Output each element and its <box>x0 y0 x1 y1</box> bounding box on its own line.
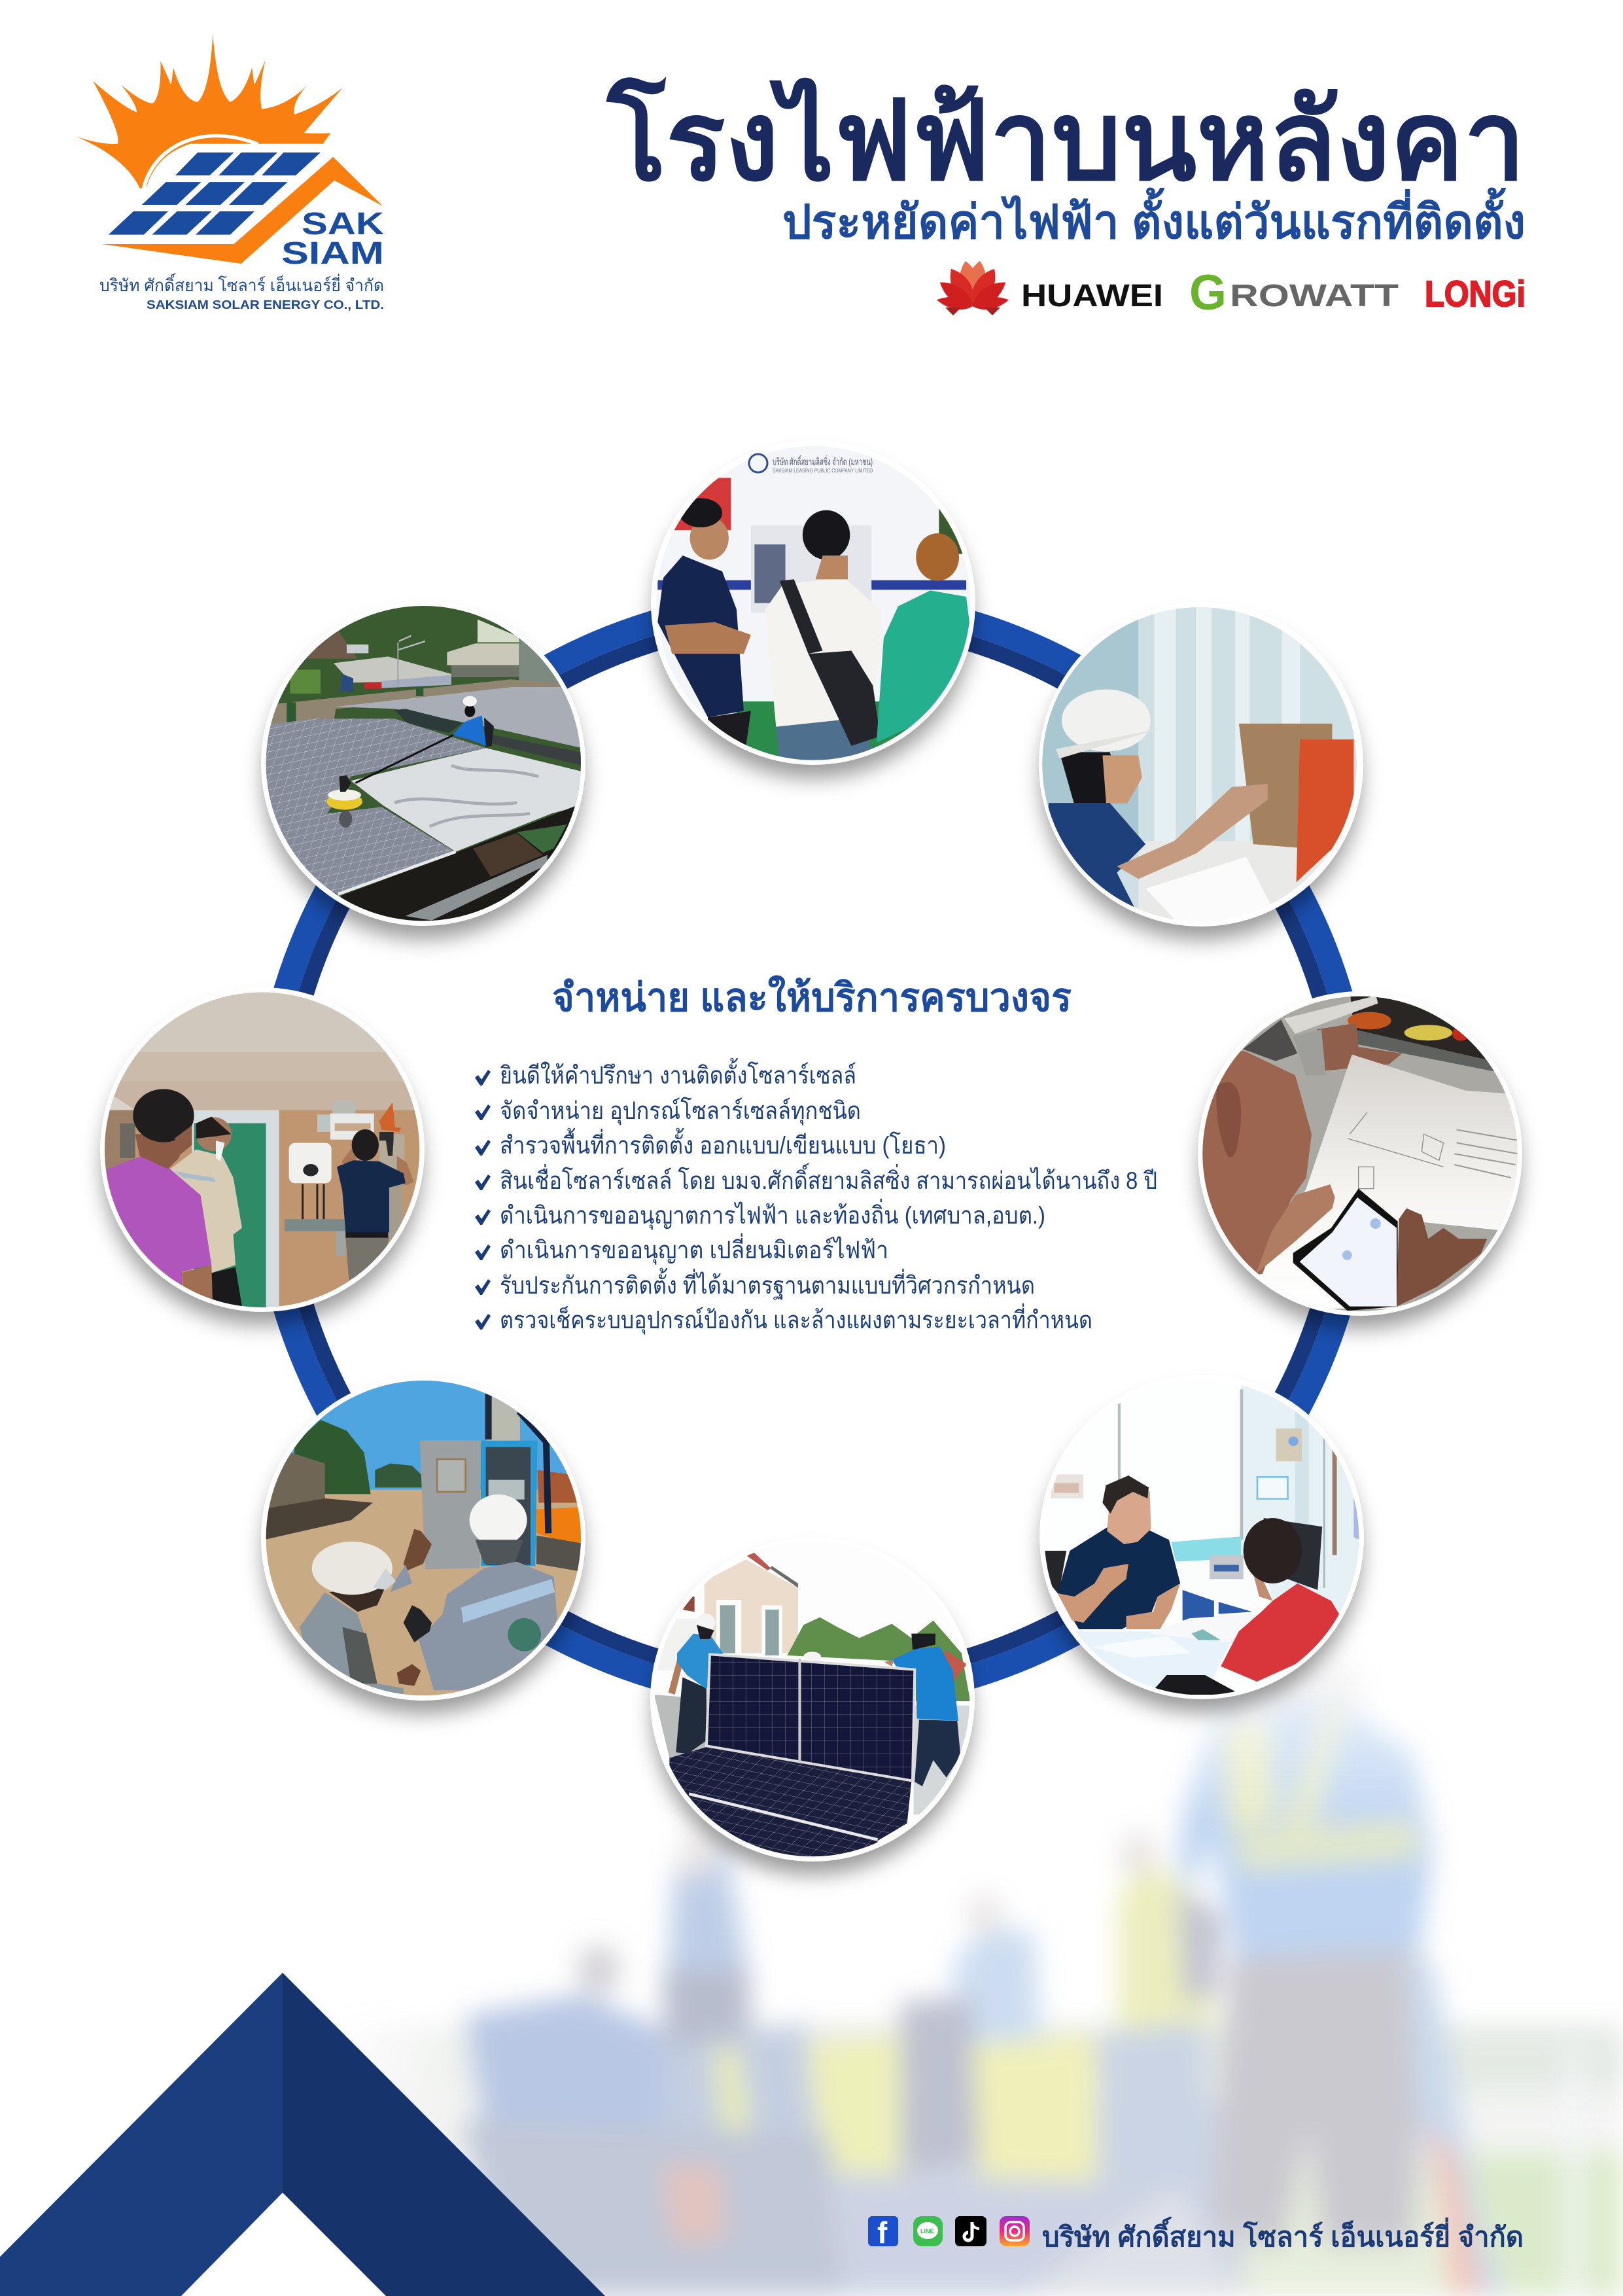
list item 6: ดำเนินการขออนุญาต เปลี่ยนมิเตอร์ไฟฟ้า <box>500 1233 888 1265</box>
footer company name: บริษัท ศักดิ์สยาม โซลาร์ เอ็นเนอร์ยี่ จำกัด <box>1042 2216 1524 2252</box>
footer social icons <box>868 2216 1030 2250</box>
photo: inspecting meter box <box>255 1368 595 1714</box>
service list <box>475 1057 1157 1335</box>
photo: engineer with clipboard <box>1031 602 1375 940</box>
logo Thai company name: บริษัท ศักดิ์สยาม โซลาร์ เอ็นเนอร์ยี่ จำกัด <box>99 273 384 295</box>
Growatt wordmark <box>1189 265 1399 321</box>
logo wordmark <box>281 207 384 271</box>
booth sign emblem and name: SAKSIAM LEASING PUBLIC COMPANY LIMITED <box>773 468 873 474</box>
photo: meeting at desk <box>1027 1374 1387 1714</box>
background: blurred team photo <box>384 1674 1623 2296</box>
list item 5: ดำเนินการขออนุญาตการไฟฟ้า และท้องถิ่น (เทศบาล,อบต.) <box>500 1198 1045 1230</box>
list item 1: ยินดีให้คำปรึกษา งานติดตั้งโซลาร์เซลล์ <box>500 1057 856 1089</box>
logo: sun and roof with solar panels <box>75 34 383 264</box>
photo: manual and phone app <box>1197 981 1524 1329</box>
logo wordmark: SIAM <box>281 236 384 271</box>
Growatt wordmark: G <box>1189 265 1227 321</box>
logo wordmark: SAK <box>302 207 384 241</box>
icon: TikTok <box>955 2216 986 2246</box>
photo: installers lifting panel <box>641 1531 981 1875</box>
photo: consultation at booth <box>650 440 981 778</box>
icon: Instagram <box>1000 2216 1030 2246</box>
list item 2: จัดจำหน่าย อุปกรณ์โซลาร์เซลล์ทุกชนิด <box>500 1097 861 1125</box>
icon: Facebook <box>868 2216 898 2250</box>
corner triangle <box>0 1973 605 2296</box>
photo: inverter installation <box>92 981 432 1325</box>
list item 3: สำรวจพื้นที่การติดตั้ง ออกแบบ/เขียนแบบ (โยธา) <box>500 1127 946 1159</box>
list item 4: สินเชื่อโซลาร์เซลล์ โดย บมจ.ศักดิ์สยามลิสซิ่ง สามารถผ่อนได้นานถึง 8 ปี <box>500 1163 1157 1194</box>
company logo <box>75 34 384 311</box>
list item 7: รับประกันการติดตั้ง ที่ได้มาตรฐานตามแบบที่วิศวกรกำหนด <box>500 1267 1035 1300</box>
booth sign emblem and name <box>749 454 873 474</box>
title: โรงไฟฟ้าบนหลังคา <box>606 77 1526 203</box>
Huawei wordmark: HUAWEI <box>1021 279 1163 313</box>
icon: LINE: LINE <box>920 2228 934 2234</box>
icon: Facebook: f <box>877 2216 888 2250</box>
photo: cleaning solar panels <box>255 595 595 939</box>
brand logos <box>935 260 1526 321</box>
icon: LINE <box>913 2216 943 2246</box>
Growatt wordmark: ROWATT <box>1230 279 1399 313</box>
subtitle: ประหยัดค่าไฟฟ้า ตั้งแต่วันแรกที่ติดตั้ง <box>782 187 1526 249</box>
service ring <box>262 599 1363 1700</box>
services heading: จำหน่าย และให้บริการครบวงจร <box>552 975 1072 1019</box>
list item 8: ตรวจเช็คระบบอุปกรณ์ป้องกัน และล้างแผงตามระยะเวลาที่กำหนด <box>500 1303 1092 1335</box>
logo English company name: SAKSIAM SOLAR ENERGY CO., LTD. <box>147 298 384 311</box>
booth sign emblem and name: บริษัท ศักดิ์สยามลิสซิ่ง จำกัด (มหาชน) <box>773 455 873 468</box>
icon: Huawei petals <box>935 260 1010 315</box>
Longi wordmark: LONGi <box>1425 273 1526 314</box>
